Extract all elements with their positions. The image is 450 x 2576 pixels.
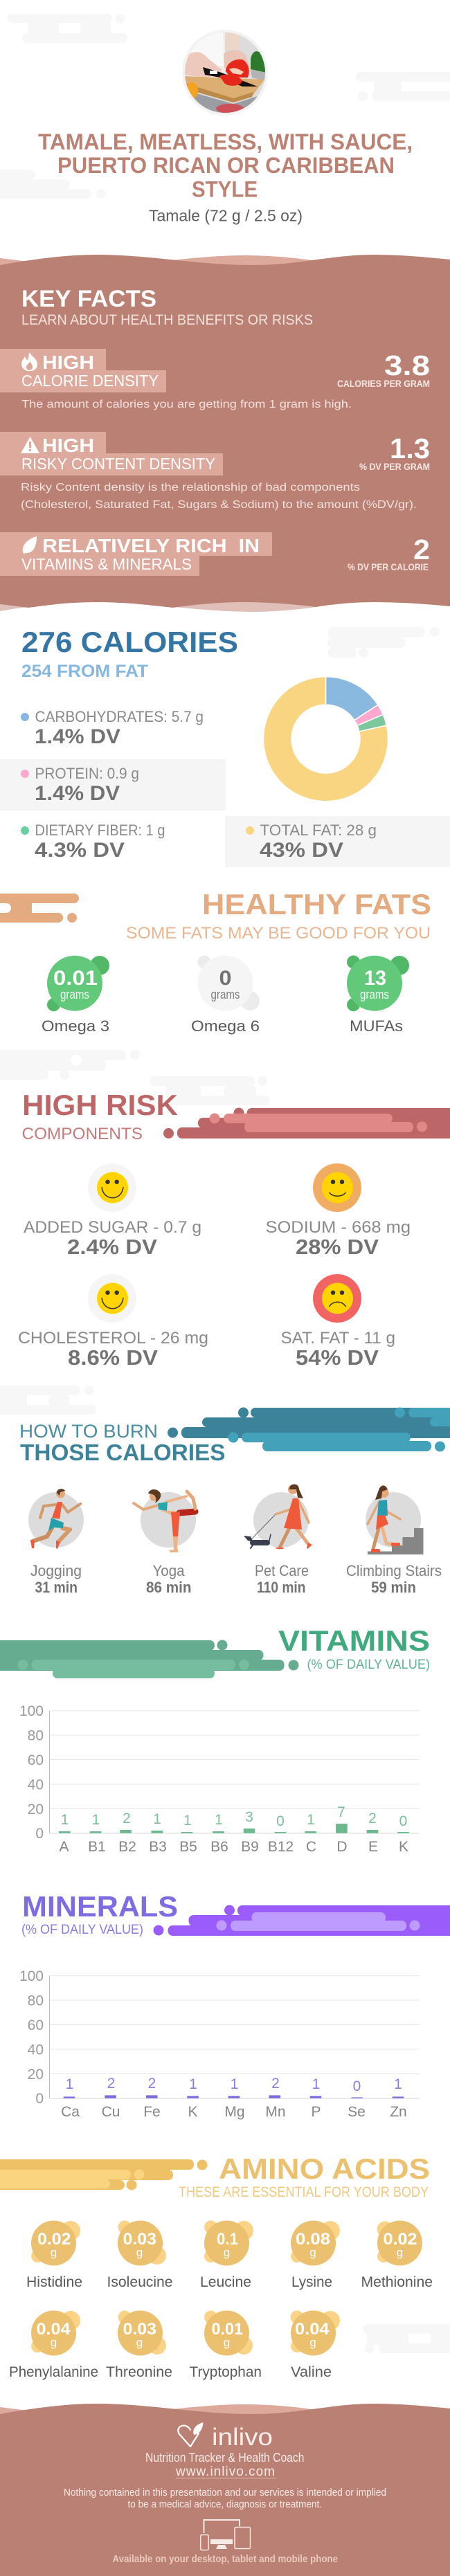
availability note: Available on your desktop, tablet and mobile phone	[112, 2553, 338, 2565]
amino: methionine	[361, 2220, 433, 2290]
minerals heading	[21, 1890, 178, 1937]
added sugar: 2.4% DV	[67, 1235, 157, 1259]
fact: vitamins and minerals	[0, 532, 430, 576]
high risk heading: HIGH RISK	[22, 1089, 178, 1121]
bar chart: vitamins: B3	[149, 1839, 167, 1855]
legend: protein: PROTEIN: 0.9 g	[35, 765, 139, 782]
healthy fats heading: SOME FATS MAY BE GOOD FOR YOU	[126, 924, 431, 943]
burn heading: THOSE CALORIES	[20, 1440, 226, 1465]
added sugar	[24, 1163, 201, 1259]
bar chart: minerals: 1	[231, 2076, 238, 2092]
amino: valine: 0.04	[295, 2320, 330, 2339]
bar chart: minerals: Zn	[390, 2104, 407, 2120]
icon: warning triangle	[21, 437, 39, 453]
bar chart: vitamins: 1	[61, 1812, 69, 1828]
bar chart: vitamins: B12	[268, 1839, 294, 1855]
omega 6: Omega 6	[191, 1017, 260, 1035]
serving size: Tamale (72 g / 2.5 oz)	[149, 206, 303, 224]
disclaimer: to be a medical advice, diagnosis or treatment.	[127, 2498, 322, 2510]
amino: isoleucine: g	[136, 2246, 143, 2259]
bar chart: vitamins: 1	[183, 1813, 192, 1829]
bar chart: minerals: 1	[312, 2076, 320, 2092]
amino: histidine	[26, 2220, 82, 2290]
bar chart: minerals: Fe	[143, 2104, 161, 2120]
activity: jogging	[28, 1489, 84, 1596]
bar chart: vitamins: C	[306, 1839, 316, 1855]
fact: vitamins and minerals: % DV PER CALORIE	[348, 561, 429, 572]
burn heading: HOW TO BURN	[19, 1421, 158, 1442]
legend: dietary fiber: 4.3% DV	[35, 839, 125, 862]
panel: key facts	[0, 255, 450, 612]
added sugar: ADDED SUGAR - 0.7 g	[24, 1218, 201, 1237]
vitamins heading: (% OF DAILY VALUE)	[307, 1658, 430, 1672]
legend: protein	[0, 759, 226, 810]
amino acids heading	[179, 2152, 430, 2200]
minerals heading: MINERALS	[22, 1890, 178, 1923]
heading decoration	[163, 1107, 450, 1139]
bar chart: vitamins: 2	[368, 1811, 377, 1826]
vitamins heading	[278, 1624, 430, 1672]
amino: leucine: g	[224, 2246, 230, 2259]
legend: dietary fiber	[21, 822, 165, 862]
panel: high risk	[18, 1089, 450, 1370]
fact: risky content density: HIGH	[42, 435, 94, 456]
sodium	[266, 1163, 411, 1259]
amino: lysine: g	[309, 2246, 316, 2259]
vitamins heading: VITAMINS	[278, 1624, 430, 1657]
amino: phenylalanine: 0.04	[36, 2320, 71, 2339]
amino: methionine: 0.02	[384, 2230, 417, 2249]
bar chart: minerals: Ca	[61, 2104, 80, 2120]
fact: risky content density: % DV PER GRAM	[359, 461, 430, 472]
MUFAs	[347, 955, 409, 1035]
title: STYLE	[192, 177, 258, 202]
calories heading: 276 CALORIES	[21, 626, 238, 658]
healthy fats heading	[126, 888, 431, 943]
bar chart: vitamins: 1	[92, 1812, 100, 1828]
omega 6: 0	[219, 967, 231, 990]
amino: isoleucine	[107, 2220, 173, 2290]
bar chart: minerals: 1	[66, 2076, 73, 2092]
icon: flame	[21, 352, 37, 371]
panel: calories	[0, 626, 450, 867]
title: TAMALE, MEATLESS, WITH SAUCE,	[38, 129, 413, 154]
fact: risky content density: (Cholesterol, Saturated Fat, Sugars & Sodium) to the amount (%DV/gr).	[21, 499, 417, 511]
amino: leucine: 0.1	[217, 2230, 238, 2249]
bar chart: minerals: Cu	[102, 2104, 120, 2120]
omega 3: Omega 3	[42, 1017, 109, 1035]
activity: pet care: Pet Care	[255, 1562, 309, 1579]
icon: woman walking dog	[244, 1484, 312, 1549]
heading decoration	[168, 1408, 450, 1452]
bar chart: minerals: 2	[148, 2076, 156, 2092]
fact: risky content density: Risky Content density is the relationship of bad components	[21, 482, 360, 493]
amino: phenylalanine: g	[51, 2336, 57, 2349]
icon: leaf	[23, 536, 37, 554]
fact: calorie density: 3.8	[384, 350, 430, 381]
bar chart: minerals: Mn	[265, 2104, 286, 2120]
amino: tryptophan: g	[224, 2336, 230, 2349]
calories heading	[21, 626, 238, 681]
bar chart: vitamins: 80	[28, 1727, 44, 1744]
fact: calorie density: HIGH	[42, 352, 94, 373]
high risk heading	[22, 1089, 178, 1143]
icon: jogger	[30, 1489, 80, 1553]
heading decoration	[0, 1640, 299, 1678]
activity: climbing stairs: Climbing Stairs	[346, 1562, 442, 1579]
bar chart: vitamins: K	[399, 1839, 408, 1855]
amino: threonine	[106, 2310, 172, 2380]
amino: methionine: Methionine	[361, 2274, 433, 2290]
bar chart: vitamins: D	[336, 1839, 348, 1855]
amino: valine: Valine	[291, 2364, 332, 2380]
omega 3: 0.01	[53, 967, 98, 990]
amino acids heading: AMINO ACIDS	[219, 2152, 430, 2185]
bar chart: minerals: P	[311, 2104, 321, 2120]
panel: amino acids	[0, 2152, 433, 2380]
fact: calorie density: CALORIES PER GRAM	[337, 378, 430, 389]
amino: lysine	[291, 2220, 340, 2290]
bar chart: minerals: 0	[35, 2091, 44, 2107]
legend: total fat: TOTAL FAT: 28 g	[260, 822, 377, 839]
bar chart: vitamins: 1	[153, 1811, 161, 1827]
amino: isoleucine: Isoleucine	[107, 2274, 173, 2290]
cholesterol: CHOLESTEROL - 26 mg	[18, 1329, 208, 1348]
amino: valine: g	[309, 2336, 316, 2349]
panel: healthy fats	[0, 888, 431, 1035]
omega 3	[42, 956, 109, 1035]
bar chart: minerals: 20	[28, 2067, 44, 2083]
sodium: 28% DV	[296, 1235, 379, 1259]
amino: tryptophan: Tryptophan	[190, 2364, 262, 2380]
fact: vitamins and minerals: 2	[413, 534, 430, 565]
activity: climbing stairs	[346, 1485, 442, 1596]
fact: vitamins and minerals: RELATIVELY RICH IN	[42, 535, 260, 556]
amino: threonine: Threonine	[106, 2364, 172, 2380]
sodium: SODIUM - 668 mg	[266, 1218, 411, 1237]
saturated fat	[281, 1274, 395, 1370]
bar chart: vitamins: 100	[19, 1703, 44, 1719]
healthy fats heading: HEALTHY FATS	[202, 888, 431, 920]
bar chart: vitamins: 2	[123, 1811, 131, 1826]
bar chart: vitamins: B6	[210, 1839, 228, 1855]
heading decoration	[0, 2159, 208, 2190]
website link: www.inlivo.com	[175, 2465, 275, 2479]
amino: lysine: 0.08	[296, 2230, 330, 2249]
heading decoration	[154, 1905, 450, 1936]
legend: carbohydrates	[21, 708, 204, 748]
bar chart: minerals: 100	[19, 1968, 44, 1984]
fact: risky content density: RISKY CONTENT DENSITY	[21, 455, 215, 473]
legend: dietary fiber: DIETARY FIBER: 1 g	[35, 822, 165, 839]
calories heading: 254 FROM FAT	[21, 662, 148, 681]
amino: leucine: Leucine	[200, 2274, 251, 2290]
bar chart: minerals: K	[188, 2104, 198, 2120]
logo: inlivo	[212, 2424, 273, 2451]
burn heading	[19, 1421, 226, 1465]
amino: threonine: g	[136, 2336, 143, 2349]
cholesterol: 8.6% DV	[68, 1345, 158, 1370]
title: PUERTO RICAN OR CARIBBEAN	[57, 153, 395, 178]
bar chart: vitamins: 0	[276, 1813, 285, 1829]
activity: climbing stairs: 59 min	[371, 1579, 416, 1596]
amino: isoleucine: 0.03	[123, 2230, 156, 2249]
bar chart: minerals: Se	[348, 2104, 366, 2120]
activity: yoga: 86 min	[146, 1579, 191, 1596]
bar chart: vitamins: A	[59, 1839, 69, 1855]
key facts heading: KEY FACTS	[21, 286, 156, 312]
bar chart: vitamins: 60	[28, 1752, 44, 1768]
bar chart: minerals: 0	[353, 2078, 361, 2094]
amino: methionine: g	[397, 2246, 403, 2259]
bar chart: minerals: Mg	[224, 2104, 245, 2120]
disclaimer	[64, 2487, 386, 2510]
fact: calorie density	[0, 349, 430, 410]
amino: phenylalanine	[9, 2310, 98, 2380]
activity: jogging: 31 min	[35, 1579, 78, 1596]
panel: minerals	[19, 1890, 450, 2120]
minerals heading: (% OF DAILY VALUE)	[21, 1923, 143, 1937]
activity: pet care	[244, 1484, 312, 1596]
icon: devices	[201, 2520, 251, 2550]
amino: histidine: g	[51, 2246, 57, 2259]
saturated fat: SAT. FAT - 11 g	[281, 1329, 395, 1348]
icon: woman on stairs	[368, 1485, 424, 1554]
bar chart: minerals: 1	[394, 2076, 402, 2092]
high risk heading: COMPONENTS	[22, 1125, 143, 1143]
legend: protein: 1.4% DV	[35, 782, 120, 805]
legend: carbohydrates: CARBOHYDRATES: 5.7 g	[35, 708, 204, 725]
legend: total fat: 43% DV	[260, 839, 343, 862]
bar chart: vitamins: 40	[28, 1777, 44, 1793]
MUFAs: MUFAs	[350, 1017, 403, 1035]
key facts heading	[21, 286, 313, 328]
activity: yoga	[134, 1489, 196, 1596]
bar chart: vitamins: 3	[245, 1809, 253, 1825]
bar chart: vitamins: E	[368, 1839, 378, 1855]
fact: vitamins and minerals: VITAMINS & MINERALS	[21, 555, 192, 573]
donut chart	[263, 677, 388, 801]
saturated fat: 54% DV	[296, 1345, 379, 1370]
MUFAs: grams	[360, 988, 389, 1001]
amino: valine	[291, 2310, 340, 2380]
bar chart: vitamins: 0	[399, 1813, 407, 1829]
omega 3: grams	[60, 988, 89, 1001]
fact: risky content density	[0, 432, 430, 511]
bar chart: minerals: 40	[28, 2042, 44, 2058]
legend: total fat	[225, 816, 450, 867]
amino: leucine	[200, 2220, 253, 2290]
panel: vitamins	[0, 1624, 430, 1855]
tagline: Nutrition Tracker & Health Coach	[145, 2451, 305, 2465]
logo	[178, 2422, 273, 2451]
amino: threonine: 0.03	[123, 2320, 156, 2339]
bar chart: vitamins: 1	[215, 1812, 223, 1828]
header panel	[38, 28, 413, 224]
bar chart: vitamins: 1	[307, 1812, 315, 1828]
bar chart: minerals: 1	[189, 2076, 197, 2092]
activity: jogging: Jogging	[30, 1562, 82, 1579]
key facts heading: LEARN ABOUT HEALTH BENEFITS OR RISKS	[21, 312, 313, 328]
omega 6	[191, 955, 260, 1035]
bar chart: vitamins	[19, 1703, 420, 1855]
MUFAs: 13	[364, 967, 386, 990]
bar chart: vitamins: B5	[179, 1839, 197, 1855]
food photo	[180, 28, 270, 118]
fact: risky content density: 1.3	[390, 433, 430, 464]
amino: histidine: 0.02	[37, 2230, 71, 2249]
activity: pet care: 110 min	[257, 1579, 306, 1596]
fact: calorie density: The amount of calories you are getting from 1 gram is high.	[21, 399, 352, 410]
bar chart: vitamins: B1	[88, 1839, 106, 1855]
fact: calorie density: CALORIE DENSITY	[21, 372, 159, 390]
cholesterol	[18, 1274, 208, 1370]
bar chart: vitamins: 0	[35, 1826, 44, 1842]
bar chart: minerals: 80	[28, 1993, 44, 2008]
amino: lysine: Lysine	[291, 2274, 332, 2290]
panel: footer	[0, 2404, 450, 2576]
bar chart: vitamins: B2	[118, 1839, 136, 1855]
amino: phenylalanine: Phenylalanine	[9, 2364, 98, 2380]
omega 6: grams	[210, 988, 240, 1001]
bar chart: minerals: 60	[28, 2017, 44, 2033]
legend: carbohydrates: 1.4% DV	[35, 725, 120, 748]
icon: yoga pose	[134, 1489, 195, 1552]
title	[38, 129, 413, 202]
bar chart: vitamins: 7	[337, 1804, 345, 1820]
activity: yoga: Yoga	[152, 1562, 185, 1579]
amino: histidine: Histidine	[26, 2274, 82, 2290]
panel: how to burn calories	[19, 1408, 450, 1596]
bar chart: minerals	[19, 1968, 420, 2120]
bar chart: minerals: 2	[107, 2076, 115, 2092]
bar chart: vitamins: B9	[241, 1839, 259, 1855]
amino: tryptophan: 0.01	[212, 2320, 243, 2339]
amino: tryptophan	[190, 2310, 262, 2380]
disclaimer: Nothing contained in this presentation and our services is intended or implied	[64, 2487, 386, 2498]
bar chart: minerals: 2	[271, 2076, 280, 2092]
bar chart: vitamins: 20	[28, 1802, 44, 1817]
heading decoration	[0, 894, 79, 923]
